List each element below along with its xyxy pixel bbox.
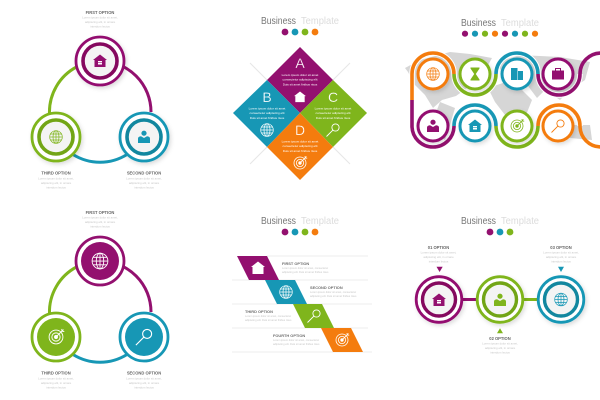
panel: three-step horizontal process	[416, 216, 584, 354]
text: third option: Lorem ipsum dolor sit amet,	[38, 376, 74, 380]
diamond C: Duis sit amet finibus risus	[316, 116, 351, 120]
legend dots	[282, 229, 318, 235]
text: third option: adipiscing elit. Duis sit amet finibus risus	[245, 318, 292, 322]
heading	[261, 16, 339, 27]
diamond A	[267, 47, 333, 113]
text: fourth option: adipiscing elit. Duis sit amet finibus risus	[273, 342, 320, 346]
world map	[405, 52, 592, 140]
text: 03 option: Lorem ipsum dolor sit amet,	[543, 250, 579, 254]
text: second option: adipiscing elit. Duis sit amet finibus risus	[310, 294, 357, 298]
node: second option person	[120, 113, 168, 161]
pointer: 03	[558, 267, 564, 272]
diamond D: consectetur adipiscing elit	[283, 144, 318, 148]
panel: staircase parallelograms	[232, 216, 372, 352]
wave halo	[412, 53, 580, 147]
text: 02 option: 02 OPTION	[489, 336, 511, 341]
text: first option	[282, 261, 329, 274]
heading: Business	[261, 216, 296, 227]
heading: Template	[301, 216, 339, 227]
wave path segments	[412, 53, 600, 147]
diamond D: Lorem ipsum dolor sit amet	[282, 140, 319, 144]
cycle connector arcs	[49, 61, 151, 162]
text: third option: interdum lectus	[46, 186, 66, 190]
heading: Business	[261, 16, 296, 27]
text: third option: THIRD OPTION	[41, 171, 71, 176]
text: first option: adipiscing elit, in ornare	[85, 220, 116, 224]
cycle connector arcs	[49, 261, 151, 362]
diamond A: Lorem ipsum dolor sit amet	[282, 73, 319, 77]
diamond B	[233, 80, 300, 147]
text: third option: adipiscing elit, in ornare	[41, 181, 72, 185]
text: first option: FIRST OPTION	[282, 261, 309, 266]
text: first option: Lorem ipsum dolor sit amet, consectetur	[282, 266, 328, 270]
text: second option: SECOND OPTION	[127, 371, 161, 376]
step 2	[265, 280, 307, 304]
diamond D: D	[295, 122, 305, 138]
text: third option: Lorem ipsum dolor sit amet,	[38, 176, 74, 180]
heading: Business	[461, 216, 496, 227]
node: hourglass	[460, 59, 490, 89]
diamond D: Duis sit amet finibus risus	[283, 149, 318, 153]
heading	[461, 216, 539, 227]
text: 02 option: adipiscing elit, in ornare	[485, 346, 516, 350]
text: fourth option: Lorem ipsum dolor sit amet, consectetur	[273, 338, 319, 342]
diamond C	[300, 80, 367, 147]
node: building	[502, 59, 532, 89]
text: third option	[38, 171, 74, 190]
diamond C: consectetur adipiscing elit	[316, 111, 351, 115]
connectors	[460, 298, 540, 301]
panel: three-option cycle, filled	[32, 210, 168, 390]
heading	[461, 18, 539, 29]
node: second option magnifier	[120, 313, 168, 361]
text: 03 option: 03 OPTION	[550, 245, 572, 250]
node: house	[460, 111, 490, 141]
text: second option: Lorem ipsum dolor sit amet,	[126, 376, 162, 380]
pointer: 02	[497, 328, 503, 333]
text: third option	[245, 309, 292, 322]
step 1	[237, 256, 279, 280]
text: third option: Lorem ipsum dolor sit amet, consectetur	[245, 314, 291, 318]
diamond B: Duis sit amet finibus risus	[250, 116, 285, 120]
text: 01 option	[421, 245, 457, 264]
text: first option	[82, 210, 118, 228]
diamond C: Lorem ipsum dolor sit amet	[315, 106, 352, 110]
text: 01 option: Lorem ipsum dolor sit amet,	[421, 250, 457, 254]
text: first option: interdum lectus	[90, 224, 110, 228]
text: 02 option: interdum lectus	[490, 350, 510, 354]
text: third option: adipiscing elit, in ornare	[41, 381, 72, 385]
diamond B: consectetur adipiscing elit	[250, 111, 285, 115]
heading	[261, 216, 339, 227]
text: 03 option: adipiscing elit, in ornare	[546, 255, 577, 259]
node: briefcase	[543, 59, 573, 89]
text: first option: Lorem ipsum dolor sit amet,	[82, 216, 118, 220]
panel: three-option cycle, outlined	[32, 10, 168, 190]
panel: diamond matrix	[233, 16, 367, 180]
text: 02 option: Lorem ipsum dolor sit amet,	[482, 342, 518, 346]
text: second option	[310, 285, 357, 298]
text: second option: interdum lectus	[134, 386, 154, 390]
text: 01 option: interdum lectus	[429, 260, 449, 264]
node: first option house	[76, 37, 124, 85]
legend dots	[462, 31, 538, 37]
diamond B: Lorem ipsum dolor sit amet	[249, 106, 286, 110]
node: first option globe	[76, 237, 124, 285]
node: third option globe	[32, 113, 80, 161]
text: 01 option: adipiscing elit, in ornare	[423, 255, 454, 259]
text: second option: SECOND OPTION	[310, 285, 343, 290]
text: first option: Lorem ipsum dolor sit amet,	[82, 16, 118, 20]
node: 02 person	[477, 277, 523, 322]
text: second option	[126, 371, 162, 390]
node: 03 globe	[538, 277, 584, 322]
text: 02 option	[482, 336, 518, 354]
text: first option: FIRST OPTION	[86, 10, 114, 15]
diamond C: C	[328, 89, 338, 105]
text: first option: adipiscing elit. Duis sit amet finibus risus	[282, 270, 329, 274]
text: 03 option: interdum lectus	[551, 260, 571, 264]
text: third option	[38, 371, 74, 390]
step 3	[293, 304, 334, 328]
text: second option: interdum lectus	[134, 186, 154, 190]
text: first option: interdum lectus	[90, 24, 110, 28]
step 4	[321, 328, 363, 352]
diamond A: Duis sit amet finibus risus	[283, 82, 318, 86]
text: first option: adipiscing elit, in ornare	[85, 20, 116, 24]
diamond B: B	[262, 89, 272, 105]
text: second option	[126, 171, 162, 190]
heading: Template	[501, 216, 539, 227]
text: 01 option: 01 OPTION	[428, 245, 449, 250]
diamond A: consectetur adipiscing elit	[283, 78, 318, 82]
node: target	[502, 111, 532, 141]
legend dots	[487, 229, 513, 235]
node: 01 house	[416, 277, 462, 322]
text: fourth option	[273, 333, 320, 346]
text: third option: THIRD OPTION	[41, 371, 71, 376]
panel: world map timeline	[405, 18, 600, 147]
text: third option: THIRD OPTION	[245, 309, 273, 314]
text: second option: adipiscing elit, in ornare	[129, 381, 160, 385]
node: person	[418, 111, 448, 141]
diamond A: A	[295, 55, 305, 71]
text: first option	[82, 10, 118, 28]
text: 03 option	[543, 245, 579, 264]
pointer: 01	[436, 267, 443, 272]
text: first option: FIRST OPTION	[86, 210, 114, 215]
text: second option: adipiscing elit, in ornare	[129, 181, 160, 185]
text: second option: Lorem ipsum dolor sit amet,	[126, 176, 162, 180]
text: third option: interdum lectus	[46, 386, 66, 390]
node: third option target	[32, 313, 80, 361]
text: second option: SECOND OPTION	[127, 171, 161, 176]
diamond D	[267, 113, 333, 180]
node: magnifier	[543, 111, 573, 141]
node: globe	[418, 59, 448, 89]
text: fourth option: FOURTH OPTION	[273, 333, 305, 338]
heading: Template	[501, 18, 539, 29]
legend dots	[282, 29, 318, 35]
heading: Template	[301, 16, 339, 27]
text: second option: Lorem ipsum dolor sit amet, consectetur	[310, 290, 356, 294]
heading: Business	[461, 18, 496, 29]
